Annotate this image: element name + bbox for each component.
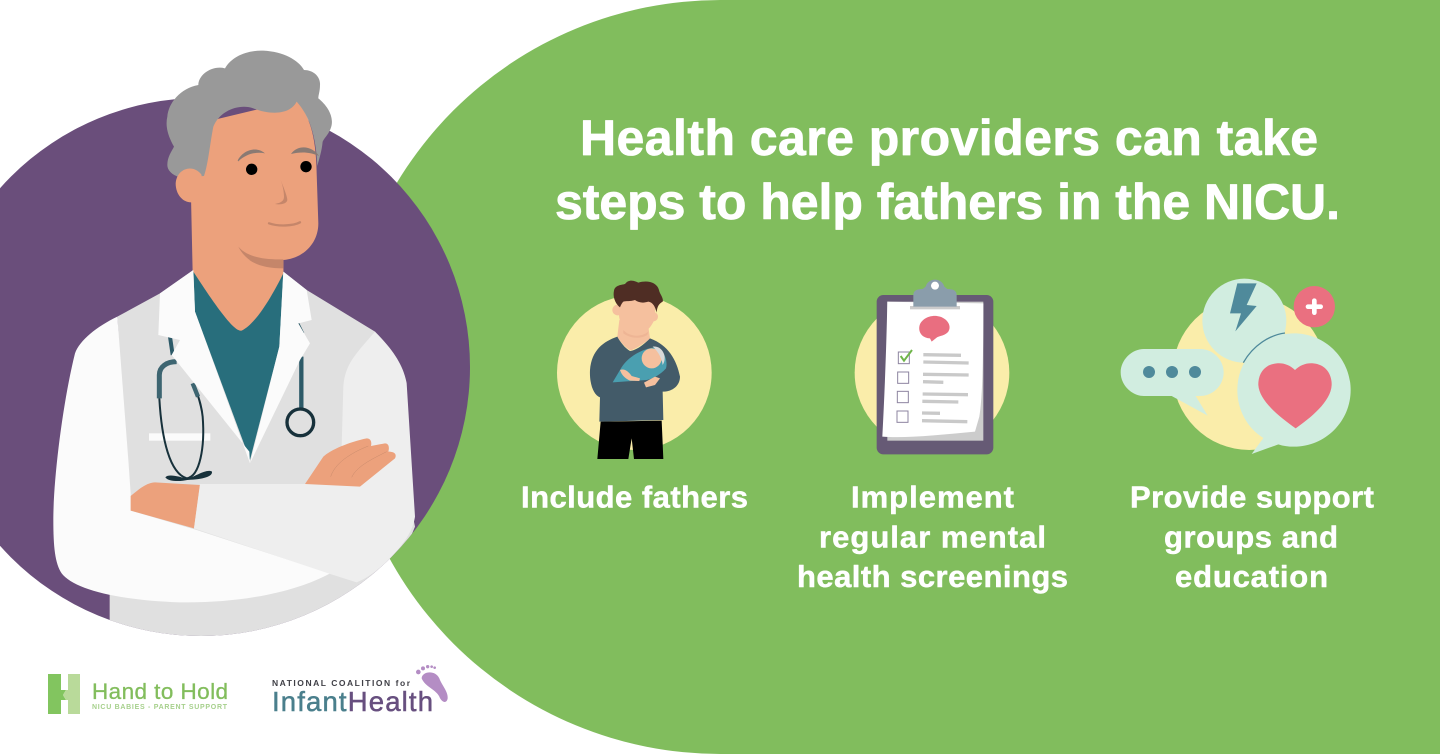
label: Implement regular mental health screenings <box>797 480 1068 594</box>
label: Provide support groups and education: Provide support <box>1130 480 1374 514</box>
label: Implement regular mental health screenings: health screenings <box>797 559 1068 594</box>
title: steps to help fathers in the NICU. <box>555 174 1340 230</box>
icon: father holding baby <box>557 281 712 459</box>
label: Implement regular mental health screenings: regular mental <box>819 520 1046 554</box>
label: Provide support groups and education: groups and <box>1164 520 1338 554</box>
icon: footprint <box>416 665 448 702</box>
title <box>555 110 1340 230</box>
logo: Hand to Hold <box>48 674 228 714</box>
logo name: Hand to Hold <box>92 679 228 704</box>
illustration: doctor <box>53 51 415 693</box>
label: Include fathers: Include fathers <box>521 480 748 514</box>
logo: National Coalition for Infant Health <box>272 665 448 717</box>
label: Provide support groups and education <box>1130 480 1374 594</box>
logo small heading: NATIONAL COALITION for <box>272 678 411 688</box>
logo name: InfantHealth <box>272 686 433 717</box>
doctor head <box>167 51 332 277</box>
title: Health care providers can take <box>580 110 1318 166</box>
panel: green background <box>343 0 1440 754</box>
label: Provide support groups and education: education <box>1175 559 1328 594</box>
logo tagline: NICU BABIES - PARENT SUPPORT <box>92 704 228 711</box>
logo mark: H <box>48 674 80 714</box>
doctor coat and body <box>53 260 415 636</box>
icon: clipboard checklist <box>855 280 1009 454</box>
label: Implement regular mental health screenings: Implement <box>851 480 1014 514</box>
icon: support speech bubbles <box>1121 279 1351 454</box>
panel: purple circle <box>0 98 470 636</box>
